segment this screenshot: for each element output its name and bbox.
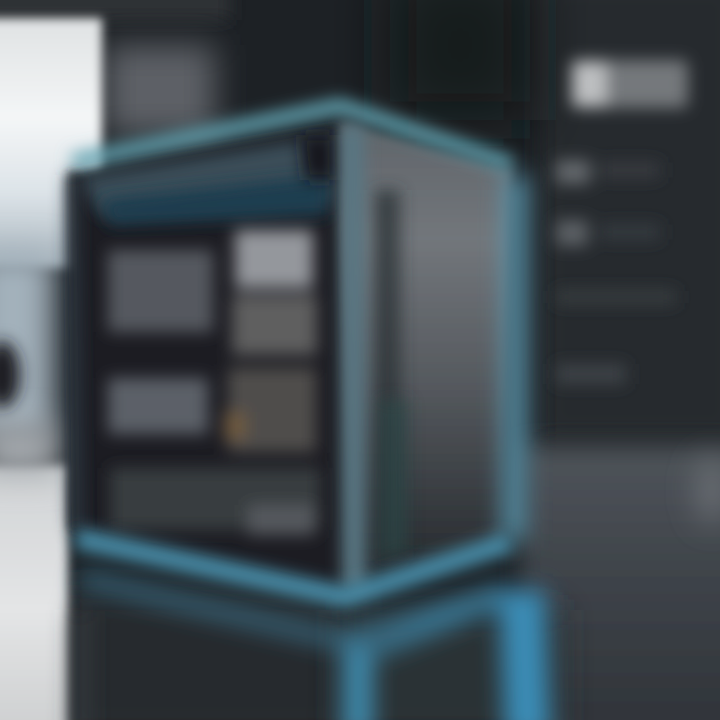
top edge [72, 106, 512, 165]
right face [340, 122, 512, 590]
inner top [80, 135, 330, 215]
left face [68, 125, 345, 590]
cube reflection on floor [80, 578, 528, 720]
centre vertical edge [352, 125, 354, 590]
cube teal edges [72, 106, 516, 597]
left vertical edge [72, 175, 76, 530]
left bright window [0, 18, 215, 720]
shelves [108, 230, 320, 535]
cube body [68, 122, 512, 590]
wall panel: blurred labels [556, 60, 688, 384]
bottom edge [76, 538, 510, 597]
right vertical edge [514, 175, 516, 540]
bright sign [572, 60, 688, 108]
inner right-face darker strip [374, 190, 402, 570]
floor [60, 445, 720, 720]
